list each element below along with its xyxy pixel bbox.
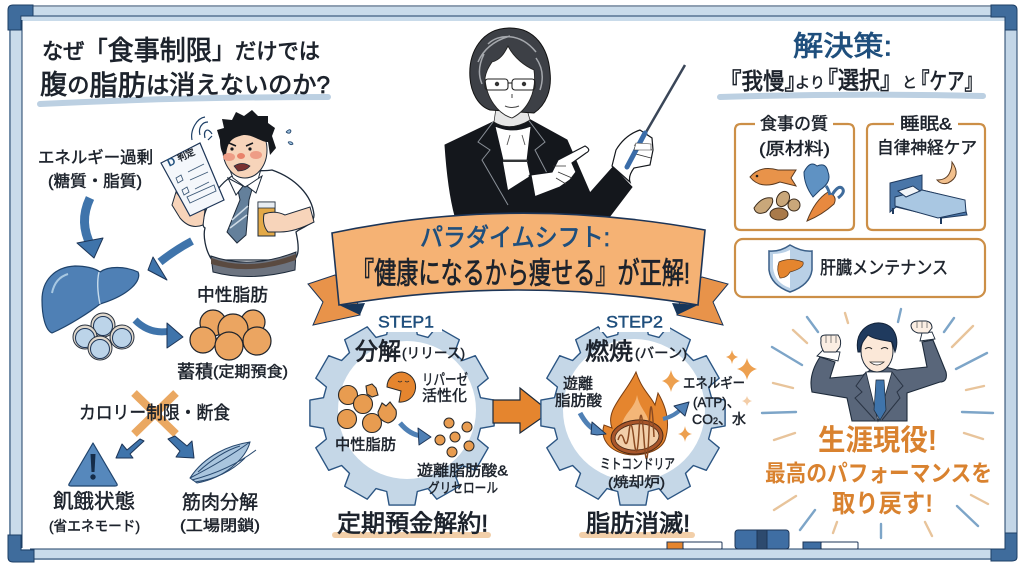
heading: solution: 『選択』 — [817, 68, 901, 94]
label: mitochondria: ミトコンドリア — [600, 456, 675, 472]
panel: liver maintenance: 肝臓メンテナンス — [820, 258, 948, 278]
icon: fat globules breaking down — [338, 384, 396, 432]
title: left question: 腹の脂肪は消えないのか? — [40, 70, 330, 100]
decoration: celebration rays — [762, 309, 993, 538]
gear: step 2 — [541, 312, 725, 505]
icon: lipase pacman — [387, 372, 416, 402]
arrow: to neutral fat — [135, 320, 183, 348]
label: lipase activation: リパーゼ — [422, 372, 468, 388]
label: muscle breakdown: 筋肉分解 — [182, 492, 258, 514]
gear: step 1 — [310, 312, 494, 505]
label: energy output: 、水 — [718, 411, 746, 427]
panel: sleep and autonomic care: 自律神経ケア — [877, 138, 977, 158]
panel: sleep and autonomic care: 睡眠& — [900, 114, 953, 134]
heading: solution: 『ケア』 — [912, 68, 982, 94]
label: energy surplus — [38, 148, 153, 190]
icon: shield with liver — [769, 245, 812, 292]
banner: paradigm shift: 『健康になるから痩せる』が正解! — [352, 258, 690, 290]
label: starvation: (省エネモード) — [49, 518, 140, 534]
label: free fatty acid: 脂肪酸 — [555, 392, 602, 410]
callout: lifelong active: 最高のパフォーマンスを — [765, 460, 992, 486]
panel: food quality: (原材料) — [759, 140, 830, 158]
label: mitochondria — [600, 456, 675, 490]
banner: paradigm shift — [308, 213, 728, 325]
label: lipase activation — [422, 372, 468, 404]
label: combustion — [585, 338, 687, 366]
label: energy output — [683, 375, 746, 427]
label: fatty acids and glycerol: 遊離脂肪酸& — [417, 462, 508, 480]
panel: food quality: 食事の質 — [760, 114, 828, 134]
illustration: worried overweight man — [161, 110, 314, 277]
label: decomposition — [355, 338, 465, 366]
label: free fatty acid — [555, 376, 602, 410]
title: left question: なぜ「食事制限」だけでは — [42, 36, 320, 66]
panel: liver maintenance — [735, 239, 985, 297]
icon: moon — [937, 162, 956, 184]
panel: food quality — [735, 114, 854, 230]
heading: solution — [720, 30, 983, 97]
heading: solution: より — [795, 74, 825, 92]
heading: solution: 解決策: — [793, 30, 892, 62]
callout: lifelong active: 取り戻す! — [832, 490, 933, 518]
label: step 1: STEP1 — [378, 312, 434, 332]
banner: paradigm shift: パラダイムシフト: — [420, 224, 610, 252]
arrow: out to energy — [663, 402, 689, 419]
label: energy surplus: (糖質・脂質) — [48, 172, 142, 190]
arrow: into mitochondria — [580, 413, 606, 435]
label: starvation — [49, 490, 140, 534]
icon: warning triangle — [69, 443, 117, 486]
illustration: teacher with pointer — [445, 28, 685, 216]
label: energy output: エネルギー — [683, 375, 745, 391]
heading: solution: と — [902, 74, 917, 92]
heading: solution: 『我慢』 — [720, 68, 806, 94]
label: lipase activation: 活性化 — [422, 388, 467, 404]
label: free fatty acid: 遊離 — [563, 376, 593, 392]
icon: muscle — [190, 442, 256, 483]
callout: fat eliminated: 脂肪消滅! — [586, 510, 690, 538]
label: fatty acids and glycerol: グリセロール — [428, 480, 498, 496]
arrows: restriction outcomes — [116, 436, 194, 458]
label: starvation: 飢餓状態 — [53, 490, 135, 513]
label: decomposition: (リリース) — [402, 345, 465, 361]
icon: liver — [42, 266, 139, 333]
label: mitochondria: (焼却炉) — [608, 474, 665, 490]
icons: sparkles — [662, 350, 757, 442]
label: neutral fat in gear: 中性脂肪 — [335, 436, 396, 454]
arrow: step 1 to step 2 — [493, 388, 550, 433]
label: muscle breakdown — [180, 492, 260, 534]
label: storage fixed deposit — [177, 362, 288, 382]
label: step 2: STEP2 — [606, 312, 663, 332]
document: D rating — [161, 143, 224, 216]
callout: cancel fixed deposit: 定期預金解約! — [337, 510, 488, 538]
icon: bed — [890, 175, 967, 224]
icon: fish — [750, 169, 796, 186]
label: energy surplus: エネルギー過剰 — [38, 148, 153, 167]
label: decomposition: 分解 — [355, 338, 401, 366]
illustration: energetic businessman — [811, 321, 946, 421]
document: D rating: 判定 — [175, 146, 196, 164]
icon: leafy greens — [804, 164, 829, 197]
label: energy output: 2 — [713, 416, 718, 426]
icon: fat cells on liver — [73, 313, 134, 360]
label: energy output: CO — [692, 411, 713, 427]
icons: markers and eraser on tray — [667, 530, 858, 549]
title: left question — [40, 36, 330, 104]
callout: lifelong active: 生涯現役! — [818, 424, 937, 457]
label: muscle breakdown: (工場閉鎖) — [180, 518, 260, 534]
icon: carrot — [807, 186, 843, 221]
callout: lifelong active — [765, 424, 992, 518]
label: calorie restriction: カロリー制限・断食 — [79, 403, 230, 423]
label: neutral fat: 中性脂肪 — [197, 285, 268, 305]
panel: sleep and autonomic care — [867, 114, 985, 230]
icon: neutral fat balls — [190, 310, 271, 360]
label: energy output: (ATP)、 — [693, 394, 740, 410]
label: storage fixed deposit: (定期預食) — [213, 364, 288, 380]
arrow: fat to fatty acids — [400, 423, 431, 445]
icon: orange cross over calorie restriction — [134, 393, 176, 434]
arrow: man to liver — [148, 241, 192, 280]
icon: free fatty acid dots — [435, 418, 474, 457]
label: combustion: (バーン) — [635, 345, 687, 361]
icon: flame with mitochondria — [603, 372, 668, 459]
label: fatty acids and glycerol — [417, 462, 508, 496]
label: storage fixed deposit: 蓄積 — [177, 362, 213, 382]
label: combustion: 燃焼 — [585, 338, 633, 366]
document: D rating: D — [165, 155, 178, 169]
icon: nuts — [754, 189, 800, 220]
arrow: energy to liver — [77, 198, 103, 258]
